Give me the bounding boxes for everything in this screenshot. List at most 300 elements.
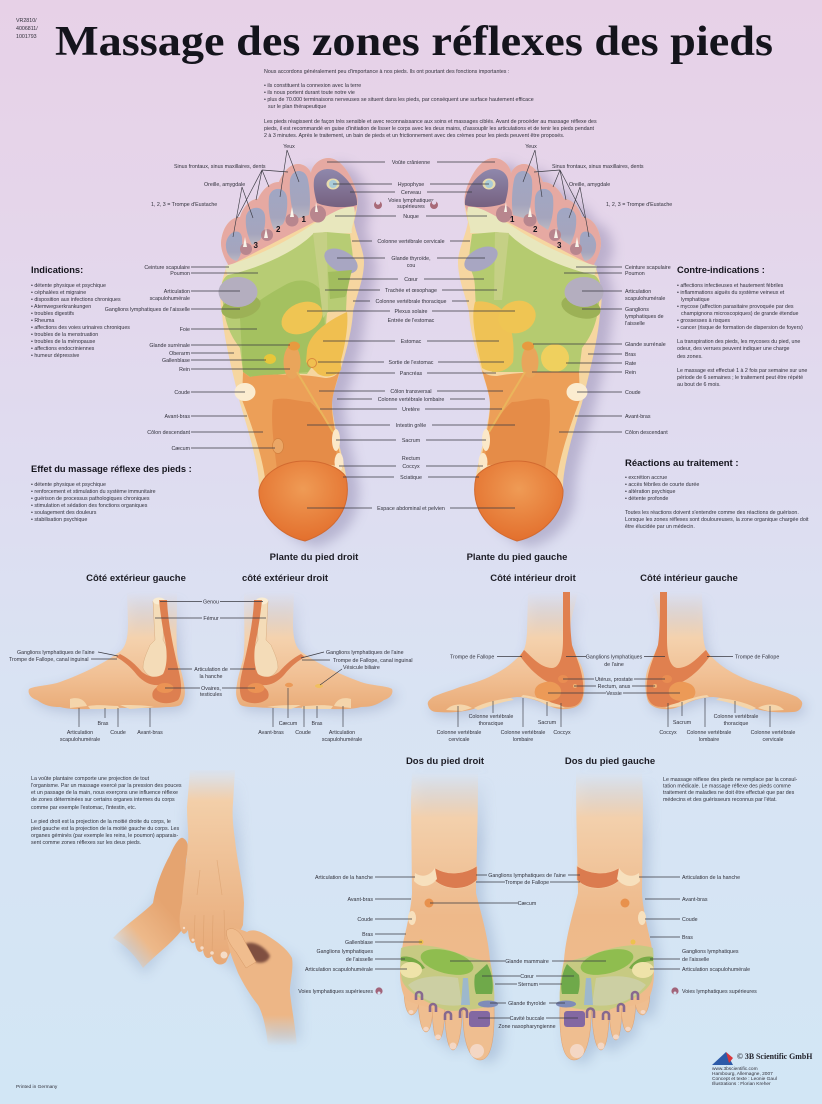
centre labels: soles: Côlon transversal: [390, 389, 432, 395]
left labels: right sole: Avant-bras: [164, 414, 190, 420]
right labels: left sole: Sinus frontaux, sinus maxillaires, dents: [552, 164, 644, 170]
labels: dorsal feet centre: Cœur: [520, 974, 534, 980]
text block: voûte plantaire: de zones déterminées sur certains organes internes du corps: [31, 797, 175, 803]
centre labels: soles: supérieures: [397, 204, 425, 210]
zone: forefoot: [400, 945, 494, 1011]
intro text block: 2 à 3 minutes. Après le traitement, un bain de pieds et un frictionnement avec des crèmes pour les pieds peuvent être proposés.: [264, 133, 564, 139]
labels: outer side feet: Articulation: [329, 730, 355, 736]
labels: dorsal feet centre: Cavité buccale: [510, 1016, 544, 1022]
text block: avertissement: traitement de maladies ne doit être effectué que par des: [663, 790, 795, 796]
centre labels: soles: Pancréas: [400, 371, 423, 377]
panel: sole of right foot: [218, 158, 364, 541]
panel: réactions au traitement: [625, 458, 809, 530]
labels: outer side feet: Ganglions lymphatiques de l'aine: [326, 650, 404, 656]
text block: voûte plantaire: organes géminés (par exemple les reins, le poumon) apparais-: [31, 833, 178, 839]
labels: dorsal left foot: Bras: [682, 935, 693, 941]
panel: effet du massage: [31, 464, 192, 523]
list: contre-indications: lymphatique: [681, 297, 710, 303]
panel: dorsal view of left foot: [556, 772, 654, 1060]
left labels: right sole: Coude: [174, 390, 190, 396]
zone: thyroid: [478, 1000, 498, 1008]
centre labels: soles: [376, 160, 447, 512]
list: contre-indications: • grossesses à risques: [677, 318, 730, 324]
labels: inner side feet: thoracique: [724, 721, 748, 727]
zone: ureter: [489, 372, 525, 432]
text block: avertissement: [663, 777, 797, 803]
catalogue code: [16, 18, 38, 40]
labels: dorsal right foot: de l'aisselle: [346, 957, 373, 963]
zone: small intestine: [272, 399, 337, 470]
panel: outer side of right foot: [236, 592, 392, 709]
hand palm shade: [245, 943, 270, 963]
text block: voûte plantaire: Le pied droit est la projection de la moitié droite du corps, le: [31, 819, 171, 825]
left labels: right sole: Glande surrénale: [149, 343, 190, 349]
labels: outer side feet: Ganglions lymphatiques de l'aine: [17, 650, 95, 656]
panel: indications: [31, 265, 130, 359]
shadow: [118, 780, 300, 1040]
text block: voûte plantaire: [31, 776, 182, 846]
toenails: [183, 927, 228, 958]
printed in: Printed in Germany: [16, 1084, 58, 1090]
list: indications: [31, 283, 130, 359]
panel: outer side of left foot: [29, 592, 185, 709]
toenails: [408, 1010, 484, 1058]
intro text block: Nous accordons généralement peu d'importance à nos pieds. Ils ont pourtant des fonctions importantes :: [264, 69, 509, 75]
zone: shoulder joint: [400, 962, 422, 978]
intro text block: pieds, il est recommandé en guise d'initiation de lisser le corps avec les deux mains, d'assouplir les articulations et de tenir les pieds pendant: [264, 126, 595, 132]
zone: heel: [259, 461, 347, 541]
intro text block: [264, 69, 597, 139]
centre labels: soles: Voûte crânienne: [392, 160, 430, 166]
zone: caecum: [272, 438, 284, 454]
labels: outer side feet: Trompe de Fallope, canal inguinal: [333, 658, 413, 664]
left labels: right sole: Sinus frontaux, sinus maxillaires, dents: [174, 164, 266, 170]
zone: liver: [240, 280, 326, 377]
logo: 3B Scientific: [712, 1052, 812, 1065]
zone: small intestine: [485, 399, 550, 470]
centre labels: soles: Espace abdominal et pelvien: [377, 506, 445, 512]
list: indications: • troubles digestifs: [31, 311, 74, 317]
list: effet du massage: • détente physique et psychique: [31, 482, 106, 488]
zone: stomach: [473, 301, 514, 372]
intro text block: sur le plan thérapeutique: [268, 104, 326, 110]
left labels: right sole: Rein: [179, 367, 190, 373]
zone: sternum: [461, 978, 470, 1005]
right labels: left sole: 1, 2, 3 = Trompe d'Eustache: [606, 202, 672, 208]
labels: inner side feet: [437, 654, 795, 743]
zone: sacrum and coccyx: [332, 429, 344, 471]
list: réactions au traitement: • accès fébriles de courte durée: [625, 482, 699, 488]
text block: avertissement: médecins et des guérisseurs reconnus par l'état.: [663, 797, 777, 803]
centre labels: soles: Colonne vertébrale thoracique: [376, 299, 447, 305]
zone: ureter: [297, 372, 333, 432]
heading: dos du pied droit: Dos du pied droit: [406, 756, 485, 767]
list: contre-indications: • affections infectieuses et hautement fébriles: [677, 283, 784, 289]
list: réactions au traitement: Lorsque les zones réflexes sont douloureuses, la zone organique chargée doit: [625, 517, 809, 523]
zone: forefoot green: [222, 232, 353, 374]
labels: inner side feet: Rectum, anus: [598, 684, 631, 690]
text block: voûte plantaire: pied gauche est la projection de la moitié gauche du corps. Les: [31, 826, 179, 832]
leader lines: outer side feet: [79, 602, 343, 727]
list: effet du massage: • renforcement et stimulation du système immunitaire: [31, 489, 156, 495]
labels: outer side feet: Bras: [98, 721, 109, 727]
zone: gallbladder: [264, 354, 276, 364]
right labels: left sole: Bras: [625, 352, 636, 358]
labels: inner side feet: cervicale: [763, 737, 784, 743]
list: effet du massage: • soulagement des douleurs: [31, 510, 97, 516]
zone: kidney: [284, 342, 300, 379]
labels: dorsal feet centre: Cæcum: [518, 901, 537, 907]
right labels: left sole: Oreille, amygdale: [569, 182, 610, 188]
labels: dorsal feet centre: Glande mammaire: [505, 959, 549, 965]
list: réactions au traitement: [625, 475, 809, 530]
zone: lower foot orange: [479, 370, 580, 478]
labels: dorsal right foot: Coude: [357, 917, 373, 923]
centre labels: soles: Hypophyse: [398, 182, 424, 188]
list: indications: • humeur dépressive: [31, 353, 79, 359]
left labels: right sole: Poumon: [170, 271, 190, 277]
centre labels: soles: Plexus solaire: [395, 309, 428, 315]
zone: elbow: [408, 911, 416, 925]
list: indications: • disposition aux infections chroniques: [31, 297, 121, 303]
right labels: left sole: Poumon: [625, 271, 645, 277]
right labels: left sole: Yeux: [525, 144, 537, 150]
credits: Concept et texte : Leonie Gaul: [712, 1076, 777, 1082]
zone: caecum: [285, 683, 293, 687]
text block: voûte plantaire: sent comme zones réflexes sur les deux pieds.: [31, 840, 141, 846]
centre labels: soles: Entrée de l'estomac: [388, 318, 435, 324]
heading: effet du massage: Effet du massage réflexe des pieds :: [31, 464, 192, 474]
labels: dorsal left foot: Coude: [682, 917, 698, 923]
zone: reflex channel: [520, 592, 583, 707]
catalogue code: 1001793: [16, 34, 37, 40]
right labels: left sole: Coude: [625, 390, 641, 396]
zone: forefoot green: [469, 232, 600, 372]
labels: dorsal left foot: [682, 875, 757, 995]
labels: inner side feet: cervicale: [449, 737, 470, 743]
right labels: left sole: Ceinture scapulaire: [625, 265, 671, 271]
labels: inner side feet: Trompe de Fallope: [450, 654, 494, 660]
zone: trachea strip: [313, 232, 328, 318]
centre labels: soles: Sacrum: [402, 438, 421, 444]
thumb: [227, 929, 256, 968]
centre labels: soles: Colonne vertébrale cervicale: [377, 239, 445, 245]
icon: upper lymph pathways right: [430, 200, 438, 209]
zone: armpit lymph: [401, 957, 425, 970]
labels: dorsal right foot: Avant-bras: [347, 897, 373, 903]
labels: dorsal right foot: Voies lymphatiques supérieures: [298, 989, 373, 995]
list: effet du massage: • stimulation et sédation des fonctions organiques: [31, 503, 148, 509]
zone: rectum: [573, 684, 577, 688]
number labels: left foot: 1: [510, 215, 515, 224]
labels: inner side feet: Vessie: [606, 691, 622, 697]
labels: dorsal feet centre: Ganglions lymphatiques de l'aine: [488, 873, 566, 879]
zone: stomach outlet: [308, 358, 316, 368]
zone: shoulder: [218, 277, 263, 323]
zone: thyroid: [460, 241, 502, 277]
zone: stomach and pancreas: [306, 312, 347, 376]
labels: inner side feet: Sacrum: [673, 720, 692, 726]
zone: gallbladder: [315, 684, 323, 688]
labels: outer side feet: Coude: [110, 730, 126, 736]
panel: sole of left foot: [458, 158, 604, 541]
heading: côté intérieur gauche: Côté intérieur gauche: [640, 573, 738, 584]
zone: oral cavity: [469, 1011, 490, 1027]
centre labels: soles: Colonne vertébrale lombaire: [378, 397, 444, 403]
list: réactions au traitement: • excrétion accrue: [625, 475, 667, 481]
icon: lymph arch left: [375, 987, 383, 995]
brand name: © 3B Scientific GmbH: [737, 1052, 812, 1061]
list: contre-indications: • mycose (affection parasitaire provoquée par des: [677, 304, 794, 310]
intro text block: Les pieds réagissent de façon très sensible et avec reconnaissance aux soins et massages ciblés. Avant de procéder au massage réflexe des: [264, 119, 597, 125]
foot: [400, 772, 494, 1010]
left labels: right sole: [105, 144, 295, 452]
labels: inner side feet: thoracique: [479, 721, 503, 727]
credits: Hambourg, Allemagne, 2007: [712, 1071, 773, 1077]
list: effet du massage: • stabilisation psychique: [31, 517, 87, 523]
list: contre-indications: Le massage est effectué 1 à 2 fois par semaine sur une: [677, 368, 807, 374]
zone: caecum: [424, 898, 434, 908]
left arm and hand: [113, 838, 188, 968]
leader lines: dorsal feet: [375, 875, 680, 1018]
text block: voûte plantaire: l'organisme. Par un massage exercé par la pression des pouces: [31, 783, 182, 789]
left labels: right sole: Articulation: [164, 289, 190, 295]
intro text block: • plus de 70.000 terminaisons nerveuses se situent dans les pieds, par conséquent une surface hautement efficace: [264, 97, 534, 103]
list: contre-indications: [677, 283, 807, 388]
labels: outer side feet: testicules: [200, 692, 222, 698]
right labels: left sole: scapulohumérale: [625, 296, 665, 302]
labels: inner side feet: Utérus, prostate: [595, 677, 633, 683]
panel: dorsal view of right foot: [400, 772, 498, 1060]
labels: inner side feet: Ganglions lymphatiques: [586, 654, 643, 660]
zone: spleen: [541, 344, 569, 372]
zone: lower foot orange: [242, 370, 343, 478]
labels: outer side feet: Fémur: [203, 616, 219, 622]
intro text block: • ils nous portent durant toute notre vie: [264, 90, 355, 96]
zone: groin bands: [434, 866, 477, 888]
labels: dorsal feet centre: Zone nasopharyngienne: [498, 1024, 556, 1030]
left labels: right sole: Yeux: [283, 144, 295, 150]
text block: voûte plantaire: La voûte plantaire comporte une projection de tout: [31, 776, 150, 782]
shadow behind soles: [232, 164, 614, 547]
zone: solar plexus: [276, 295, 328, 341]
centre labels: soles: Coccyx: [402, 464, 420, 470]
left labels: right sole: Cæcum: [171, 446, 191, 452]
panel: inner side of right foot: [428, 592, 585, 712]
labels: dorsal right foot: Bras: [362, 932, 373, 938]
list: indications: • Atemwegserkrankungen: [31, 304, 91, 310]
right labels: left sole: Avant-bras: [625, 414, 651, 420]
labels: outer side feet: Coude: [295, 730, 311, 736]
heading: côté extérieur gauche: Côté extérieur gauche: [86, 573, 186, 584]
number labels: left foot: 2: [533, 225, 538, 234]
labels: outer side feet: scapulohumérale: [60, 737, 100, 743]
labels: inner side feet: Colonne vertébrale: [437, 730, 481, 736]
list: contre-indications: La transpiration des pieds, les mycoses du pied, une: [677, 339, 800, 345]
right labels: left sole: Articulation: [625, 289, 651, 295]
zone: bone column: [143, 601, 168, 678]
text block: avertissement: Le massage réflexe des pieds ne remplace par la consul-: [663, 777, 797, 783]
foot and leg: [180, 770, 244, 964]
text block: voûte plantaire: et un passage de la main, nous exerçons une influence réflexe: [31, 790, 178, 796]
labels: inner side feet: Colonne vertébrale: [469, 714, 513, 720]
labels: outer side feet: Vésicule biliaire: [343, 665, 380, 671]
labels: outer side feet: Articulation de: [194, 667, 228, 673]
labels: inner side feet: lombaire: [513, 737, 533, 743]
heading: plante du pied gauche: Plante du pied gauche: [467, 552, 567, 563]
labels: inner side feet: lombaire: [699, 737, 719, 743]
list: réactions au traitement: Toutes les réactions doivent s'entendre comme des réactions de guérison.: [625, 510, 799, 516]
zone: metatarsal fade: [408, 976, 462, 1006]
heading: côté intérieur droit: Côté intérieur droit: [490, 573, 577, 584]
zone: ovaries: [156, 683, 174, 693]
list: indications: • affections des voies urinaires chroniques: [31, 325, 130, 331]
leader lines: inner side feet: [458, 656, 770, 727]
left labels: right sole: Côlon descendant: [147, 430, 191, 436]
heading: dos du pied gauche: Dos du pied gauche: [565, 756, 655, 767]
numbers: Eustachian tube: 1: [302, 215, 306, 224]
catalogue code: VR2810/: [16, 18, 37, 24]
labels: dorsal left foot: Articulation scapulohumérale: [682, 967, 750, 973]
labels: dorsal feet centre: Glande thyroïde: [508, 1001, 546, 1007]
labels: outer side feet: Bras: [312, 721, 323, 727]
zone: hip: [414, 868, 437, 886]
shadow: side feet: [32, 596, 805, 716]
list: indications: • céphalées et migraine: [31, 290, 86, 296]
labels: outer side feet: Avant-bras: [137, 730, 163, 736]
list: contre-indications: • inflammations aiguës du système veineux et: [677, 290, 785, 296]
labels: dorsal left foot: Voies lymphatiques supérieures: [682, 989, 757, 995]
labels: dorsal left foot: de l'aisselle: [682, 957, 709, 963]
list: contre-indications: période de 6 semaines ; le traitement peut être répété: [677, 375, 803, 381]
heading: indications: Indications:: [31, 265, 83, 275]
list: contre-indications: au bout de 6 mois.: [677, 382, 721, 388]
zone: kidney: [522, 342, 538, 378]
list: indications: • troubles de la menstruation: [31, 332, 98, 338]
labels: inner side feet: Sacrum: [538, 720, 557, 726]
number labels: left foot: [510, 215, 562, 250]
leader lines: soles: [191, 150, 622, 508]
labels: outer side feet: Articulation: [67, 730, 93, 736]
zone: solar plexus: [494, 295, 540, 339]
labels: dorsal right foot: Articulation de la hanche: [315, 875, 373, 881]
labels: outer side feet: [9, 600, 413, 743]
centre labels: soles: Cerveau: [401, 190, 421, 196]
labels: outer side feet: Trompe de Fallope, canal inguinal: [9, 657, 89, 663]
list: effet du massage: • guérison de processus pathologiques chroniques: [31, 496, 150, 502]
labels: outer side feet: Cæcum: [279, 721, 298, 727]
right labels: left sole: lymphatiques de: [625, 314, 664, 320]
centre labels: soles: Uretère: [402, 407, 420, 413]
labels: dorsal left foot: Ganglions lymphatiques: [682, 949, 739, 955]
centre labels: soles: Voies lymphatiques: [388, 198, 434, 204]
zone: uterus: [558, 675, 568, 683]
right labels: left sole: Côlon descendant: [625, 430, 668, 436]
right labels: left sole: Ganglions: [625, 307, 649, 313]
left labels: right sole: Foie: [180, 327, 190, 333]
zone: bladder: [535, 682, 561, 701]
right labels: left sole: Rate: [625, 361, 636, 367]
text block: voûte plantaire: comme par exemple l'estomac, l'intestin, etc.: [31, 805, 136, 811]
zone: elbow: [566, 383, 588, 401]
labels: inner side feet: Colonne vertébrale: [501, 730, 545, 736]
labels: dorsal feet centre: Sternum: [518, 982, 539, 988]
zone: upper lymph arches: [416, 992, 467, 1020]
right labels: left sole: Rein: [625, 370, 636, 376]
labels: inner side feet: Coccyx: [659, 730, 677, 736]
left labels: right sole: 1, 2, 3 = Trompe d'Eustache: [151, 202, 217, 208]
list: réactions au traitement: être élucidée par un médecin.: [625, 524, 695, 530]
shadow: dorsal feet: [407, 776, 661, 1063]
centre labels: soles: cou: [407, 263, 415, 269]
heading: plante du pied droit: Plante du pied droit: [270, 552, 359, 563]
title: Massage des zones réflexes des pieds: [55, 19, 773, 65]
right labels: left sole: Glande surrénale: [625, 342, 666, 348]
intro text block: • ils constituent la connexion avec la terre: [264, 83, 361, 89]
centre labels: soles: Estomac: [401, 339, 422, 345]
centre labels: soles: Intestin grêle: [396, 423, 426, 429]
labels: inner side feet: Colonne vertébrale: [687, 730, 731, 736]
left labels: right sole: Ganglions lymphatiques de l'aisselle: [105, 307, 190, 313]
zone: sole strips: [446, 695, 565, 711]
list: effet du massage: [31, 482, 156, 523]
left labels: right sole: Ceinture scapulaire: [144, 265, 190, 271]
right labels: left sole: [525, 144, 672, 436]
labels: dorsal feet centre: Trompe de Fallope: [505, 880, 549, 886]
list: contre-indications: • cancer (risque de formation de dispersion de foyers): [677, 325, 803, 331]
list: réactions au traitement: • détente profonde: [625, 496, 668, 502]
left labels: right sole: Oberarm: [169, 351, 191, 357]
heading: réactions au traitement: Réactions au traitement :: [625, 458, 738, 469]
left labels: right sole: Oreille, amygdale: [204, 182, 245, 188]
left labels: right sole: scapulohumérale: [150, 296, 190, 302]
zone: sacrum and coccyx: [478, 429, 490, 471]
zone: thyroid: [320, 243, 362, 279]
zone: heart: [474, 964, 493, 994]
zone: elbow: [234, 383, 256, 401]
list: indications: • affections endocriniennes: [31, 346, 95, 352]
numbers: Eustachian tube: 2: [276, 225, 281, 234]
toes and tendons: [194, 860, 225, 955]
panel: inner side of left foot: [645, 592, 802, 712]
numbers: Eustachian tube: [254, 215, 306, 250]
centre labels: soles: Rectum: [402, 456, 421, 462]
zone: shoulder: [559, 277, 604, 323]
credits: [712, 1066, 777, 1087]
text block: avertissement: tation médicale. Le massage réflexe des pieds comme: [663, 784, 791, 790]
left labels: right sole: Gallenblase: [162, 358, 190, 364]
zone: mammary gland: [418, 944, 476, 980]
labels: dorsal right foot: Gallenblase: [345, 940, 373, 946]
right labels: left sole: l'aisselle: [625, 321, 645, 327]
labels: dorsal right foot: Ganglions lymphatiques: [316, 949, 373, 955]
labels: dorsal feet centre: [488, 873, 566, 1030]
heading: côté extérieur droit: côté extérieur droit: [242, 573, 329, 584]
centre labels: soles: Sortie de l'estomac: [389, 360, 434, 366]
zone: gallbladder: [418, 940, 424, 944]
centre labels: soles: Glande thyroïde,: [391, 256, 431, 262]
zone: reflex channel: [116, 600, 181, 703]
catalogue code: 4006811/: [16, 26, 38, 32]
list: indications: • troubles de la ménopause: [31, 339, 95, 345]
heading: contre-indications: Contre-indications :: [677, 265, 765, 275]
list: indications: • Rheuma: [31, 318, 54, 324]
labels: dorsal right foot: [298, 875, 373, 995]
labels: outer side feet: scapulohumérale: [322, 737, 362, 743]
credits: www.3bscientific.com: [712, 1066, 758, 1072]
list: contre-indications: champignons microscopiques) de grande étendue: [681, 311, 799, 317]
zone: knee: [153, 598, 165, 604]
